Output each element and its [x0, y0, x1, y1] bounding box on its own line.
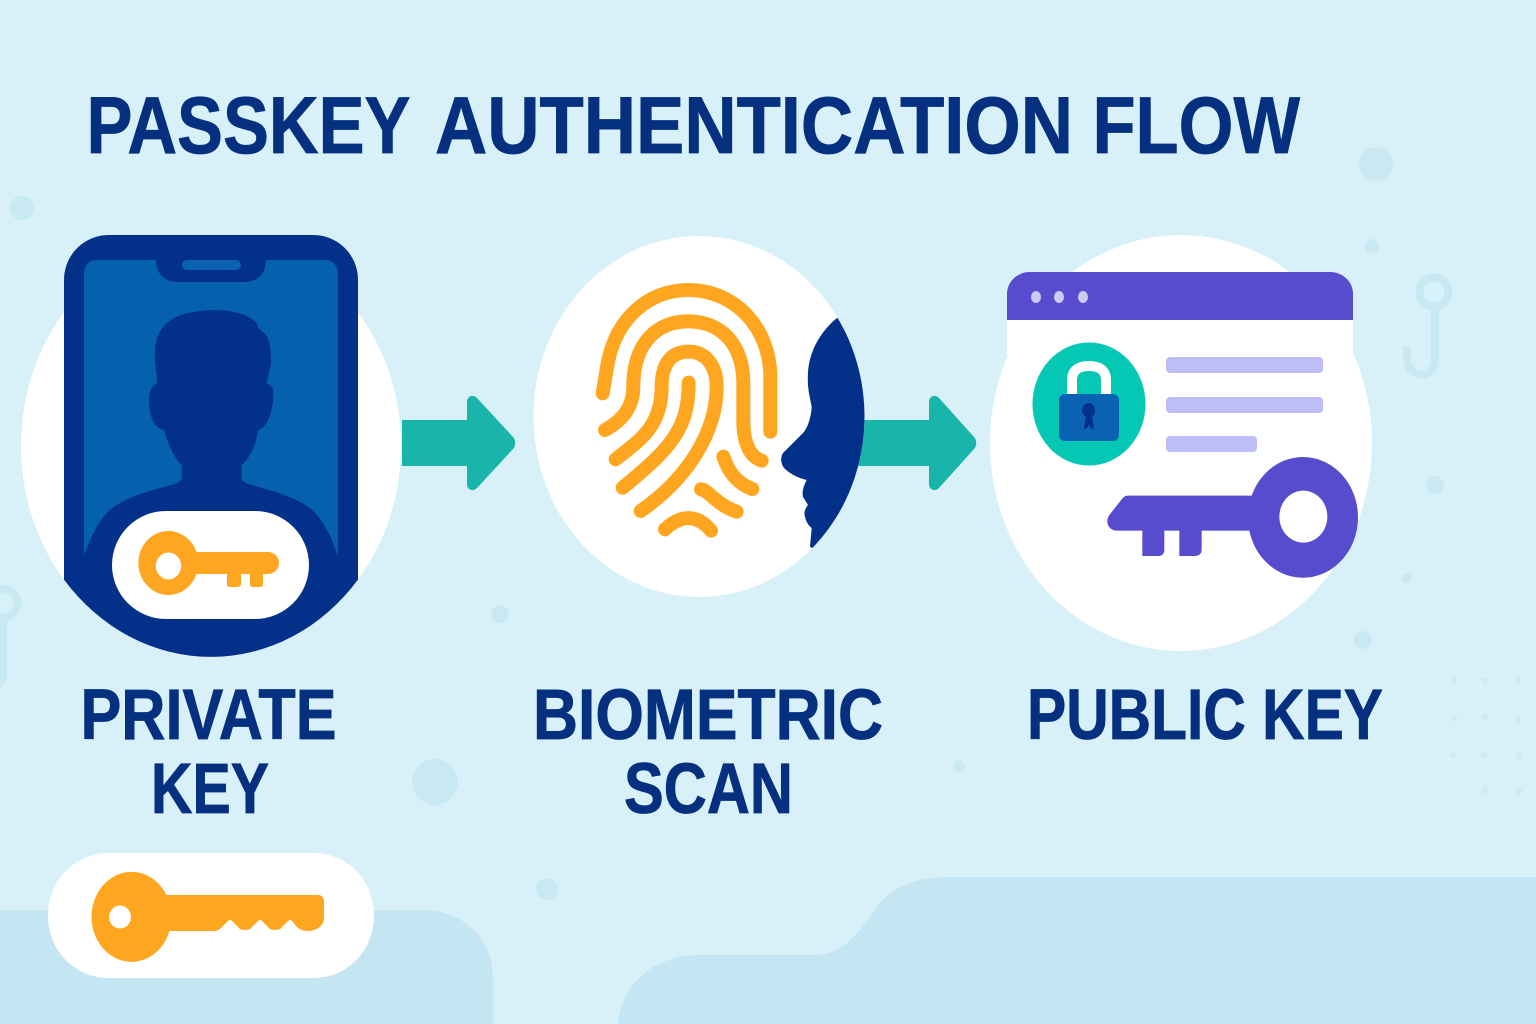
white circle — [21, 235, 401, 657]
title: FLOW — [1092, 81, 1300, 171]
icon: purple key — [1107, 457, 1358, 578]
panel: private key — [21, 235, 401, 657]
bottom right wave — [618, 877, 1536, 1024]
bottom left wave — [0, 910, 493, 1024]
label: biometric scan: SCAN — [624, 750, 793, 829]
browser window — [1007, 272, 1353, 452]
icon: phone — [64, 235, 358, 657]
arrow 2 — [858, 396, 976, 490]
icon: user silhouette — [84, 310, 338, 561]
icon: padlock — [1032, 342, 1146, 466]
title: AUTHENTICATION — [435, 81, 1073, 171]
panel: biometric scan — [534, 236, 864, 597]
label: private key: KEY — [151, 750, 269, 829]
white circle — [534, 236, 864, 597]
icon: fingerprint — [603, 290, 770, 531]
icon: face profile — [781, 318, 864, 548]
icon: key with teeth — [92, 872, 324, 962]
icon: orange key — [138, 531, 279, 595]
white circle — [990, 235, 1372, 651]
key pill — [112, 511, 309, 619]
label: biometric scan — [533, 676, 883, 829]
panel: public key — [990, 235, 1372, 651]
arrow 1 — [402, 396, 515, 490]
label: private key: PRIVATE — [80, 676, 336, 755]
title: PASSKEY — [86, 81, 410, 171]
label: public key: PUBLIC KEY — [1027, 676, 1383, 755]
background decoration — [0, 147, 1522, 900]
bottom key pill — [48, 853, 374, 978]
title — [86, 81, 1300, 171]
label: biometric scan: BIOMETRIC — [533, 676, 883, 755]
label: private key — [80, 676, 336, 829]
